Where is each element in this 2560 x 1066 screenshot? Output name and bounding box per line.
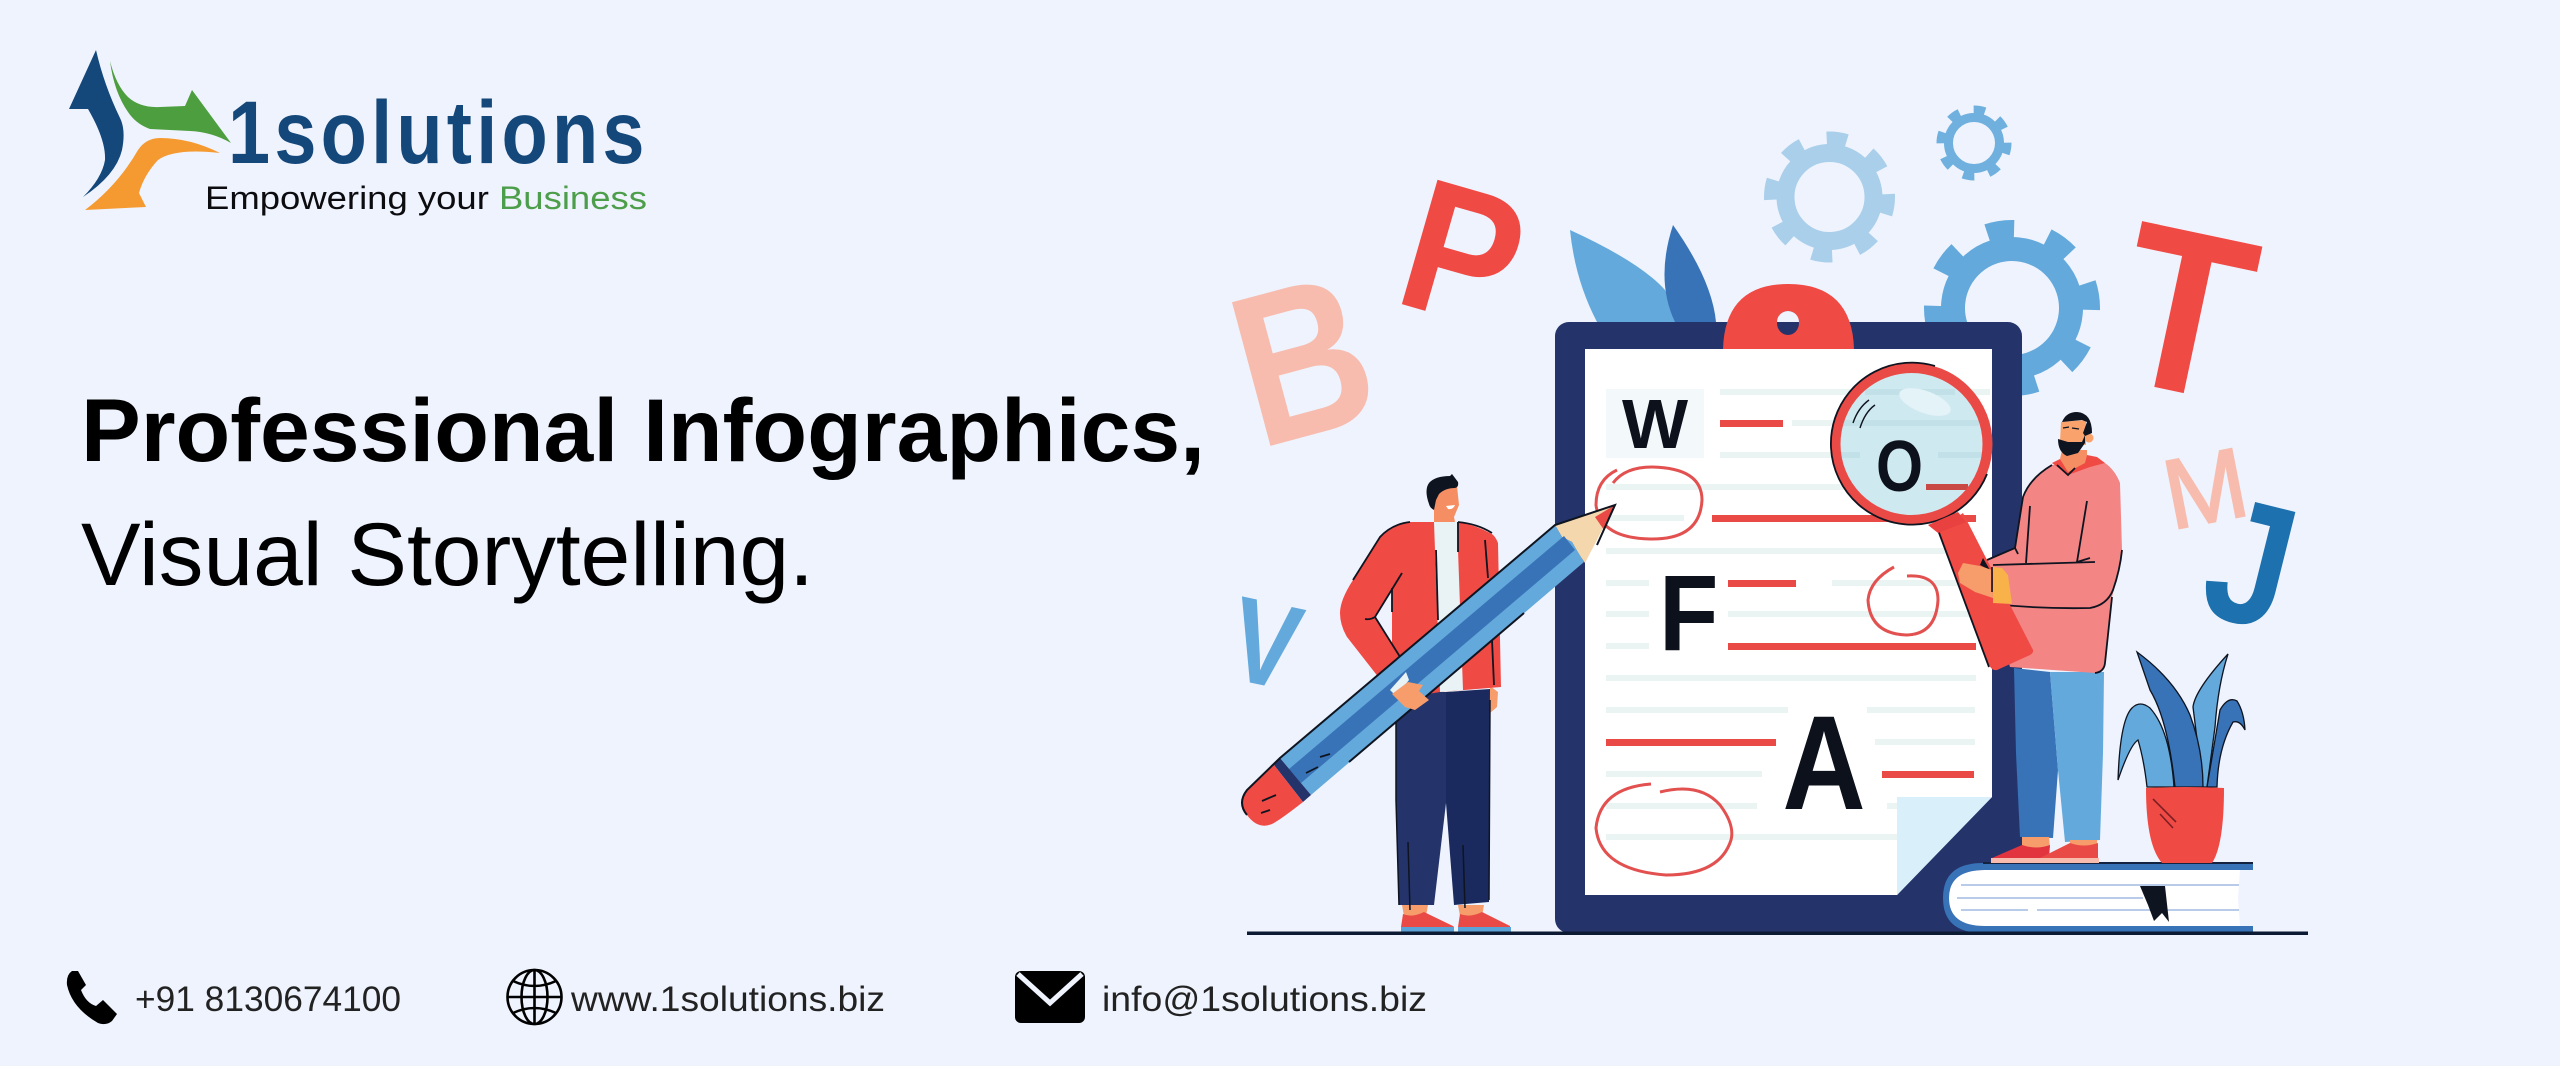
letter V: V (1219, 572, 1312, 716)
pot shine (2153, 799, 2176, 828)
gear: large (1907, 203, 2117, 413)
pencil eraser (1242, 765, 1303, 826)
page lines (1957, 885, 2239, 910)
pencil (1242, 505, 1615, 826)
cover outline (1983, 862, 2253, 864)
smile (1446, 505, 1455, 509)
pants (1396, 692, 1446, 905)
gear: light (1769, 136, 1890, 258)
hoodie (1987, 463, 2122, 673)
shoes (1992, 845, 2050, 858)
clipboard clip (1723, 284, 1854, 349)
pencil lead (1595, 505, 1615, 530)
icon: phone (67, 971, 117, 1024)
cuff (1390, 672, 1409, 696)
neck and face (1434, 486, 1459, 522)
man with pencil (1340, 474, 1511, 932)
logo mark: three arrows (69, 50, 231, 210)
letter B: B (1208, 227, 1397, 494)
face (2060, 420, 2086, 445)
pencil body (1280, 525, 1584, 795)
red highlighted lines (1606, 420, 1976, 778)
headline line 1: Professional Infographics, (81, 380, 1205, 480)
lens ring (1836, 368, 1988, 520)
phone number: +91 8130674100 (135, 980, 401, 1019)
letter T: T (2096, 171, 2275, 452)
hair (1426, 474, 1458, 510)
illustration (1208, 110, 2314, 935)
pencil band (1274, 758, 1311, 802)
lens glass (1838, 371, 1984, 517)
logo wordmark: 1solutions (228, 82, 649, 182)
ground line (1247, 932, 2308, 935)
logo: 1solutions (69, 50, 649, 216)
gear: small (1941, 110, 2007, 176)
book pages (1949, 870, 2240, 926)
ear (2084, 434, 2094, 442)
clipboard board (1555, 322, 2022, 933)
lens bands (1840, 389, 1983, 458)
text lines on paper (1606, 389, 1990, 840)
hoodie lines (1987, 465, 2122, 673)
letter P: P (1380, 137, 1546, 371)
paper sheet (1585, 349, 1992, 895)
pencil wood tip (1555, 505, 1615, 563)
letter A: A (1782, 689, 1866, 838)
website: www.1solutions.biz (570, 980, 885, 1019)
legs (2014, 668, 2058, 838)
book (1943, 863, 2253, 933)
book cover (1943, 863, 2253, 933)
plant leaves (2118, 652, 2245, 787)
letter M: M (2154, 426, 2256, 550)
letter J: J (2187, 459, 2314, 669)
clipboard (1555, 284, 2022, 933)
contact bar (67, 970, 1427, 1024)
man with magnifier (1987, 412, 2122, 863)
paper fold (1897, 797, 1992, 895)
logo tagline: Empowering your Business (205, 180, 647, 216)
bookmark (2140, 886, 2169, 922)
eyes (2063, 427, 2079, 429)
magnifying glass (1831, 363, 2033, 670)
cuff edge (1991, 567, 1993, 592)
icon: envelope (1015, 971, 1085, 1023)
pencil stripe (1289, 536, 1575, 783)
pot (2146, 787, 2224, 863)
hood collar (2052, 455, 2105, 475)
right hand (1490, 686, 1498, 713)
letter W tile: W (1622, 385, 1688, 463)
potted plant (2118, 652, 2245, 863)
icon: globe (508, 970, 562, 1024)
email: info@1solutions.biz (1102, 980, 1427, 1019)
jacket (1340, 522, 1501, 700)
thumb shadow (1980, 558, 1990, 570)
red hand-drawn circles (1596, 467, 1938, 875)
headline line 2: Visual Storytelling. (81, 504, 814, 604)
hand (1958, 563, 1993, 598)
lens reflection (1853, 400, 1875, 428)
handle (1938, 513, 2033, 670)
ankles (1402, 905, 1484, 916)
beard (2058, 435, 2085, 456)
ring outline (1831, 363, 1987, 525)
hand on pencil (1392, 682, 1429, 710)
letter F: F (1659, 552, 1718, 673)
shoes (1401, 912, 1510, 927)
letter O: O (1876, 427, 1923, 507)
pencil outlines (1242, 505, 1615, 815)
shirt (1434, 522, 1463, 692)
hair (2062, 412, 2092, 436)
lens highlight (1896, 382, 1954, 422)
leaves behind clipboard (1570, 225, 1716, 322)
headline (81, 380, 1205, 604)
neck (2060, 450, 2087, 474)
letter W tile (1606, 385, 1704, 463)
red line in lens (1926, 484, 1968, 490)
ankles (2022, 837, 2097, 848)
cuff (1993, 567, 2012, 604)
jacket lines (1353, 522, 1494, 910)
handle collar (1928, 512, 1966, 533)
